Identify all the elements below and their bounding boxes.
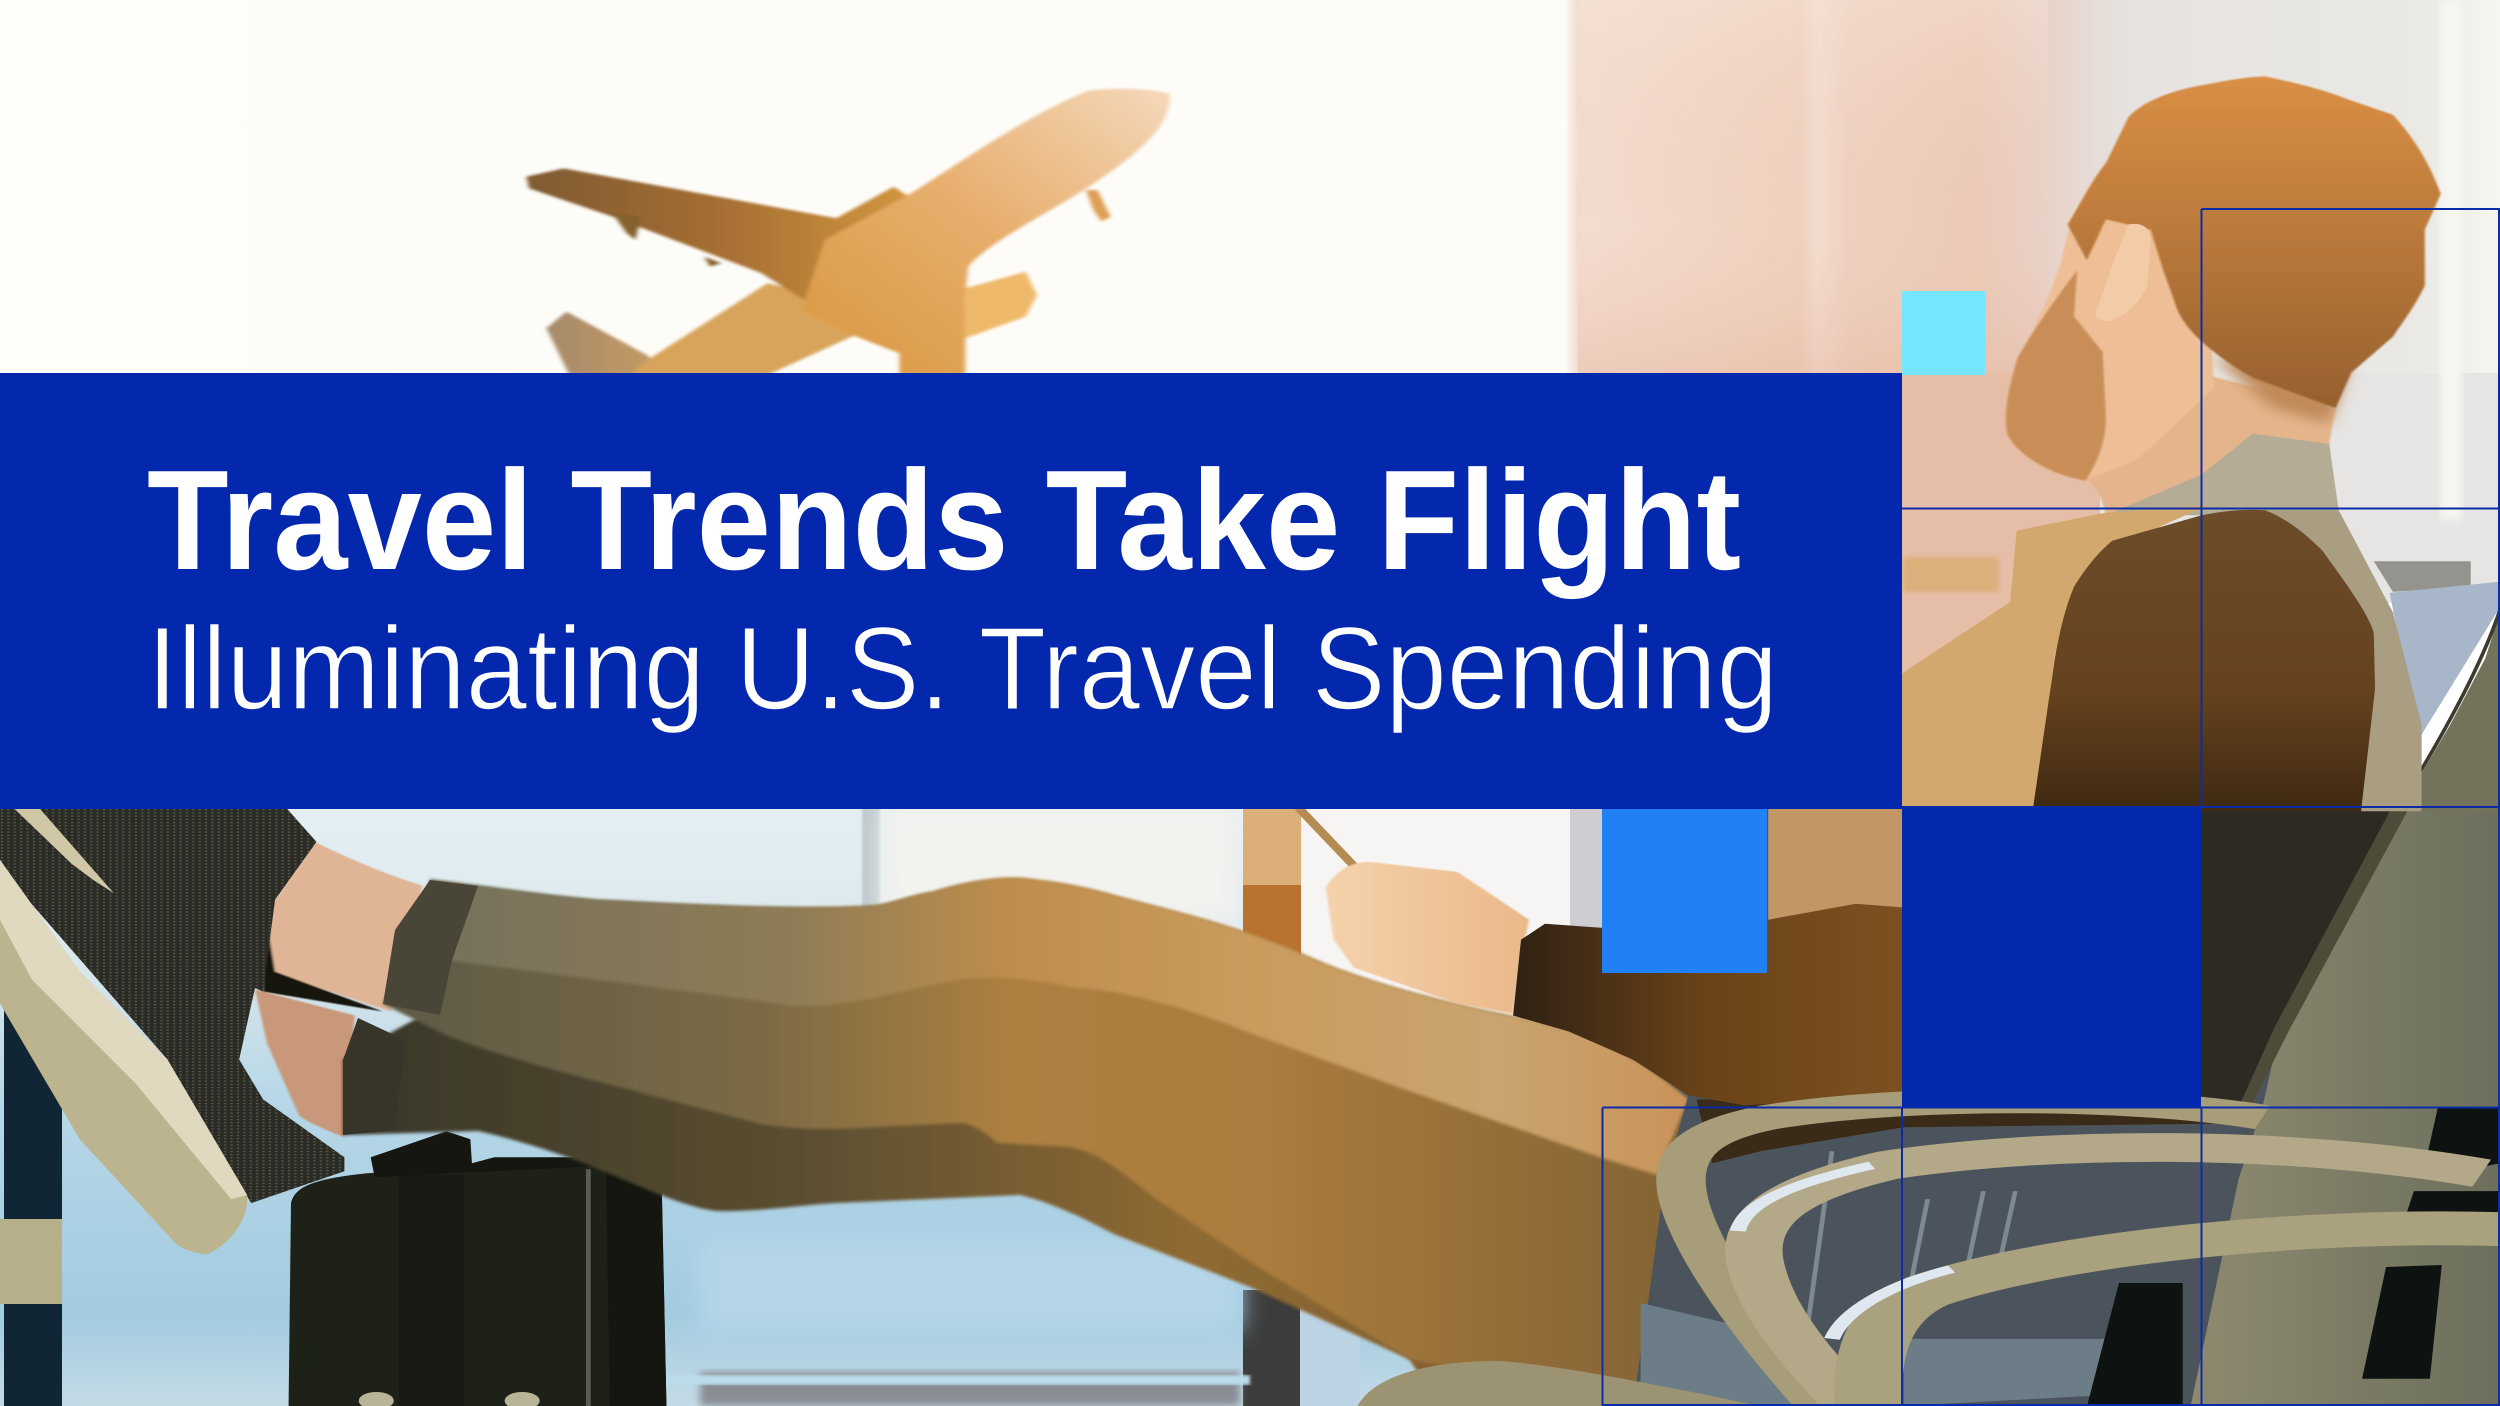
photo: man's hand, phone, sleeve and lap, lower right [1299, 796, 2500, 1406]
ear [2096, 224, 2151, 321]
dark jacket sleeve [2033, 510, 2375, 811]
upper sneaker sole edge [14, 809, 120, 900]
photo: airport window background, lower [0, 800, 2500, 1406]
photo: dark post and beige block at left edge [0, 1000, 62, 1406]
blue title band [0, 373, 1902, 809]
beard [2006, 270, 2106, 481]
lower sneaker sole [0, 860, 247, 1254]
nape shadow [2214, 357, 2348, 423]
plane right engine [965, 272, 1037, 338]
hand [1326, 862, 1529, 1014]
plane tail fin [546, 312, 670, 375]
light blue accent square [1602, 809, 1767, 973]
subtitle: Illuminating U.S. Travel Spending [147, 603, 1778, 735]
face [2006, 163, 2214, 481]
blue seat back [2390, 582, 2500, 740]
lower sneaker body [0, 820, 344, 1203]
photo: trousers knee highlight above seam [430, 878, 1688, 1175]
plane nose gear [1086, 190, 1111, 222]
wooden strip behind man [1903, 557, 1999, 592]
dark blue accent square [1902, 807, 2201, 1108]
main title: Travel Trends Take Flight [147, 441, 1741, 600]
chair edge [2399, 612, 2500, 811]
chair back [2191, 796, 2500, 1406]
photo: sneakers [0, 809, 344, 1254]
title text block [147, 441, 1778, 735]
denim jacket front [1902, 505, 2208, 811]
photo: suitcase [289, 1131, 666, 1406]
seat cushion [1358, 1361, 1760, 1406]
dark shirt right of the blue square [2199, 796, 2406, 1111]
neck [2087, 357, 2336, 515]
pale denim pocket [1641, 1303, 2111, 1406]
plane fuselage [802, 89, 1170, 375]
chair arm 2 [1754, 1147, 2482, 1406]
photo: trouser cuffs [343, 880, 478, 1135]
pale denim stripes [1808, 1151, 2015, 1323]
photo: man's head and upper body, top right [1902, 77, 2500, 811]
plane engine pods under wing [612, 213, 721, 267]
denim shoulder [2265, 510, 2422, 811]
plane wing [526, 168, 914, 313]
suitcase studs [359, 1392, 394, 1406]
photo: aeroplane taking off [526, 89, 1170, 375]
chair arm highlights [1738, 1165, 1952, 1339]
jeans and denim pocket [1633, 1095, 2246, 1406]
chair arm 1 [1681, 1101, 2262, 1406]
chair arm 3 [1868, 1228, 2500, 1406]
jacket collar [2106, 434, 2339, 515]
plane rear fuselage [630, 283, 859, 375]
photo: ankles [255, 842, 423, 1137]
dark sleeve [1513, 904, 1908, 1105]
window frame and shelf [2374, 561, 2471, 592]
chair dark gaps [2087, 1107, 2500, 1406]
photo: trousers lower leg [343, 980, 1680, 1406]
thin blue grid lines [1602, 209, 2500, 1405]
hair [2068, 77, 2441, 408]
photo: airport window background, upper [0, 0, 2500, 420]
brown shade behind the armrest [1696, 1099, 2246, 1163]
photo: pale wall panel behind the man's head [1902, 0, 2500, 673]
cyan accent square [1902, 291, 1985, 375]
phone [1299, 809, 1358, 870]
photo: trousers thigh [383, 878, 1688, 1406]
denim jacket hem [1768, 804, 1904, 924]
upper sneaker [0, 809, 316, 992]
